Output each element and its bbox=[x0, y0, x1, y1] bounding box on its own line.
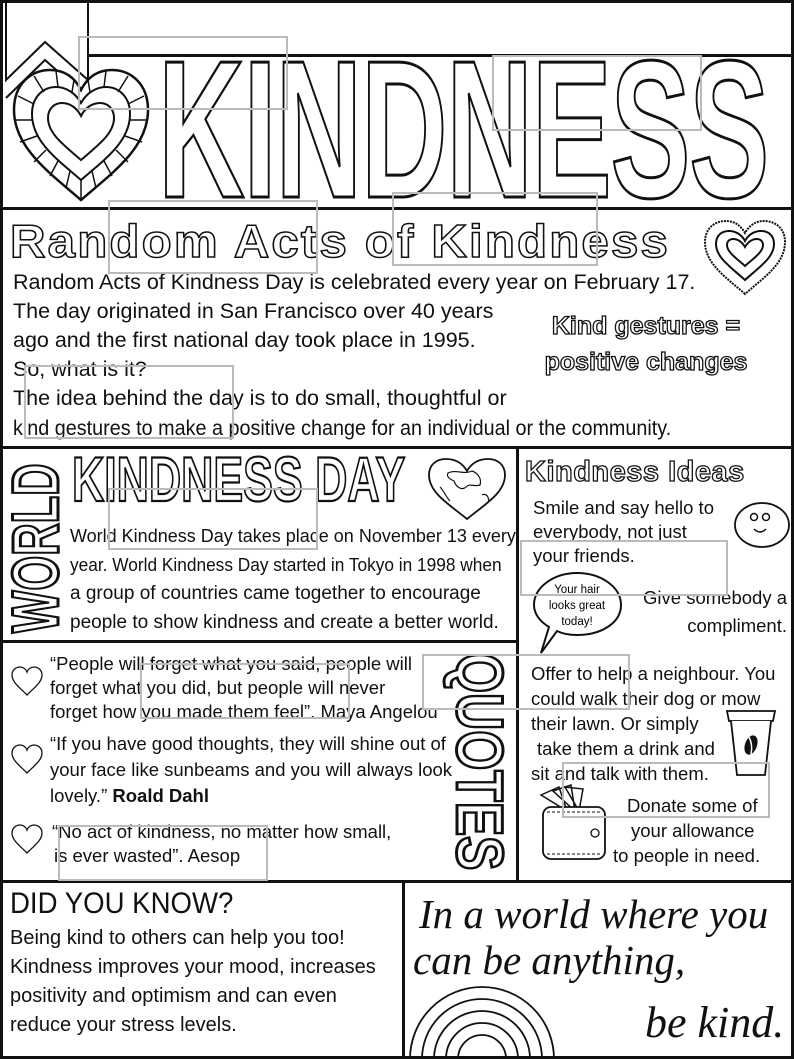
icon: heart 2 bbox=[11, 744, 43, 774]
heading: Kindness Ideas: Kindness Ideas bbox=[525, 456, 745, 488]
quote: Maya Angelou: forget how you made them feel”. Maya Angelou bbox=[50, 701, 438, 722]
quote: Maya Angelou: forget what you did, but people will never bbox=[50, 677, 385, 698]
text block: did you know: Being kind to others can help you too! bbox=[10, 927, 345, 949]
icon: wallet bbox=[540, 784, 606, 860]
icon: globe heart bbox=[428, 458, 506, 520]
icon: striped heart bbox=[12, 68, 150, 202]
text block: did you know bbox=[10, 927, 376, 1036]
text: neighbour: their lawn. Or simply bbox=[531, 713, 699, 734]
quote: Aesop: is ever wasted”. Aesop bbox=[54, 845, 240, 866]
icon: speech bubble: today! bbox=[561, 616, 593, 628]
text: script quote: can be anything, bbox=[413, 937, 685, 983]
icon: smiley bbox=[734, 502, 790, 548]
heading: KINDNESS DAY: KINDNESS DAY bbox=[72, 445, 405, 515]
text: donate: your allowance bbox=[631, 820, 754, 841]
icon: rainbow bbox=[409, 986, 555, 1056]
icon: coffee cup bbox=[726, 710, 776, 776]
text block: intro bbox=[13, 270, 695, 440]
text block: intro: Random Acts of Kindness Day is celebrated every year on February 17. bbox=[13, 270, 695, 294]
text: donate bbox=[613, 795, 760, 866]
icon: speech bubble: Your hair bbox=[554, 584, 600, 596]
text: smile bbox=[533, 497, 714, 566]
text block: intro: The day originated in San Francisco over 40 years bbox=[13, 299, 493, 323]
icon: bookmark ribbon bbox=[5, 3, 89, 99]
panel: kindness ideas bbox=[525, 456, 790, 866]
quote: Roald Dahl: your face like sunbeams and you will always look bbox=[50, 759, 452, 780]
text block: intro: The idea behind the day is to do small, thoughtful or bbox=[13, 386, 507, 410]
quote: Aesop: “No act of kindness, no matter how small, bbox=[52, 821, 391, 842]
panel: random acts of kindness bbox=[10, 215, 786, 440]
icon: heart 3 bbox=[11, 824, 43, 854]
icon: speech bubble: looks great bbox=[549, 600, 606, 612]
panel: quotes bbox=[11, 653, 517, 870]
text block: world kindness day: a group of countries came together to encourage bbox=[70, 583, 481, 604]
text block: did you know: positivity and optimism and can even bbox=[10, 985, 337, 1007]
panel: script quote bbox=[409, 891, 784, 1056]
header lines bbox=[88, 54, 794, 57]
text block: world kindness day bbox=[70, 526, 516, 633]
text: smile: everybody, not just bbox=[533, 521, 687, 542]
text: script quote bbox=[413, 891, 784, 1047]
text: compliment bbox=[643, 587, 788, 636]
callout: kind gestures bbox=[545, 312, 747, 376]
quote: Roald Dahl: lovely.” Roald Dahl bbox=[50, 785, 209, 806]
text: neighbour: take them a drink and bbox=[537, 738, 715, 759]
quote: Aesop bbox=[52, 821, 391, 866]
heading: Random Acts of Kindness: Random Acts of Kindness bbox=[10, 215, 670, 267]
text: neighbour bbox=[531, 663, 775, 784]
title: KINDNESS: KINDNESS bbox=[158, 20, 768, 239]
text: donate: to people in need. bbox=[613, 845, 760, 866]
text block: did you know: Kindness improves your mood, increases bbox=[10, 956, 376, 978]
icon: stitched heart bbox=[704, 220, 786, 296]
text: smile: Smile and say hello to bbox=[533, 497, 714, 518]
quote: Maya Angelou: “People will forget what you said, people will bbox=[50, 653, 412, 674]
text block: intro: kind gestures to make a positive change for an individual or the community. bbox=[13, 416, 671, 440]
text block: world kindness day: year. World Kindness Day started in Tokyo in 1998 when bbox=[70, 555, 502, 575]
text: script quote: In a world where you bbox=[419, 891, 768, 937]
text: neighbour: could walk their dog or mow bbox=[531, 688, 760, 709]
text: smile: your friends. bbox=[533, 545, 635, 566]
text block: intro: ago and the first national day took place in 1995. bbox=[13, 328, 476, 352]
panel: world kindness day bbox=[0, 445, 516, 634]
quote: Maya Angelou bbox=[50, 653, 438, 722]
quote: Roald Dahl: “If you have good thoughts, they will shine out of bbox=[50, 733, 446, 754]
text: donate: Donate some of bbox=[627, 795, 758, 816]
text block: world kindness day: World Kindness Day takes place on November 13 every bbox=[70, 526, 516, 546]
text: neighbour: sit and talk with them. bbox=[531, 763, 709, 784]
text block: world kindness day: people to show kindness and create a better world. bbox=[70, 612, 499, 633]
text block: intro: So, what is it? bbox=[13, 357, 147, 381]
text block: did you know: reduce your stress levels. bbox=[10, 1014, 237, 1036]
callout: kind gestures: Kind gestures = bbox=[552, 312, 740, 340]
quote: Roald Dahl bbox=[50, 733, 452, 806]
heading: WORLD (vertical): WORLD bbox=[0, 463, 72, 633]
icon: speech bubble bbox=[533, 572, 622, 654]
callout: kind gestures: positive changes bbox=[545, 348, 747, 376]
watermark boxes bbox=[78, 36, 288, 110]
heading: QUOTES (vertical): QUOTES bbox=[443, 653, 517, 870]
text: script quote: be kind. bbox=[645, 998, 784, 1047]
icon: heart 1 bbox=[11, 666, 43, 696]
panel: did you know bbox=[10, 887, 376, 1036]
heading: DID YOU KNOW?: DID YOU KNOW? bbox=[10, 887, 233, 920]
text: compliment: compliment. bbox=[687, 615, 787, 636]
text: neighbour: Offer to help a neighbour. You bbox=[531, 663, 775, 684]
text: compliment: Give somebody a bbox=[643, 587, 787, 608]
